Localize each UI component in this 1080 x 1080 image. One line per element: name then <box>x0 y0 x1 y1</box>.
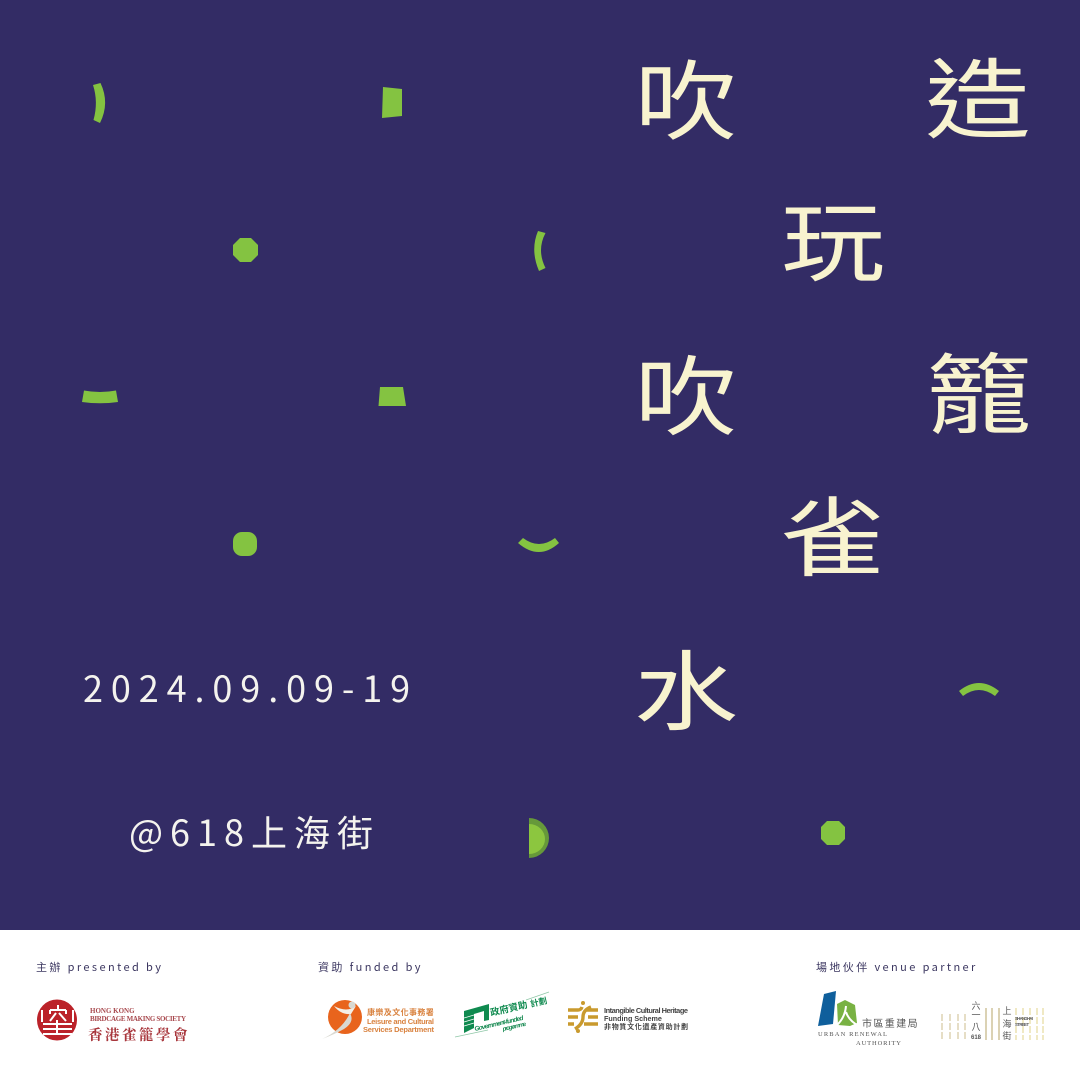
logo: Leisure and Cultural Services Department: 康樂及文化事務署 <box>367 1007 434 1018</box>
icon: green dot right <box>821 821 845 845</box>
label: presented by: 主辦 presented by <box>36 959 163 975</box>
logo: 618 Shanghai Street: SHANGHAI <box>1015 1016 1033 1021</box>
logo: Government-funded programme: 計劃 <box>529 994 548 1010</box>
icon: green arc top left <box>93 83 105 123</box>
logo: 618 Shanghai Street: 六 <box>971 999 981 1012</box>
logo: Hong Kong Birdcage Making Society: HONG KONG <box>90 1007 135 1015</box>
logo: 618 Shanghai Street: 618 <box>971 1035 982 1041</box>
logo: Urban Renewal Authority: URBAN RENEWAL <box>818 1031 887 1038</box>
label: funded by: 資助 funded by <box>318 959 423 975</box>
logo: 618 Shanghai Street: 一 <box>971 1008 981 1021</box>
icon: green smile arc <box>518 538 559 552</box>
logo: Government-funded programme: Government-funded <box>474 1015 525 1033</box>
logo: Intangible Cultural Heritage Funding Scheme: Funding Scheme <box>604 1014 662 1023</box>
logo: Government-funded programme: 政府資助 <box>489 997 529 1019</box>
logo: 618 Shanghai Street: 八 <box>971 1020 981 1033</box>
logo: Hong Kong Birdcage Making Society <box>37 1000 190 1045</box>
title: characters: 雀 <box>780 469 886 594</box>
title: characters <box>634 31 1032 748</box>
venue: @618上海街 <box>129 805 380 857</box>
logo: 618 Shanghai Street: 海 <box>1002 1017 1012 1030</box>
icon: green dot lower <box>233 532 257 556</box>
icon: green block top <box>382 87 402 118</box>
logo: 618 Shanghai Street: STREET <box>1015 1022 1029 1027</box>
logo: Government-funded programme <box>455 992 549 1037</box>
logo: 618 Shanghai Street: 街 <box>1002 1029 1012 1042</box>
title: characters: 籠 <box>926 326 1032 451</box>
title: characters: 造 <box>925 31 1031 156</box>
logo: Hong Kong Birdcage Making Society: BIRDCAGE MAKING SOCIETY <box>90 1015 186 1023</box>
footer panel <box>0 930 1080 1080</box>
logo: Leisure and Cultural Services Department: Services Department <box>363 1025 434 1034</box>
logo: Intangible Cultural Heritage Funding Scheme: 非物質文化遺產資助計劃 <box>604 1022 688 1032</box>
logo: Urban Renewal Authority: 市區重建局 <box>862 1015 919 1030</box>
logo: Urban Renewal Authority: AUTHORITY <box>856 1040 901 1047</box>
icon: green dot upper <box>233 238 258 262</box>
logo: 618 Shanghai Street <box>942 999 1043 1042</box>
logo: Hong Kong Birdcage Making Society: 香港雀籠學會 <box>88 1024 190 1045</box>
logo: Intangible Cultural Heritage Funding Scheme: Intangible Cultural Heritage <box>604 1006 688 1015</box>
icon: green block middle <box>378 387 406 406</box>
logo: Government-funded programme: programme <box>501 1022 527 1033</box>
label: venue partner: 場地伙伴 venue partner <box>816 959 978 975</box>
icon: green arc middle <box>534 231 546 271</box>
logo: Intangible Cultural Heritage Funding Scheme <box>568 1001 688 1033</box>
logo: Leisure and Cultural Services Department <box>322 1000 434 1039</box>
icon: green arc right <box>959 683 999 696</box>
logo: Leisure and Cultural Services Department: Leisure and Cultural <box>367 1017 434 1026</box>
date: 2024.09.09-19 <box>83 661 418 713</box>
title: characters: 吹 <box>635 33 737 158</box>
logo: 618 Shanghai Street: 上 <box>1002 1004 1012 1017</box>
icon: green arc left <box>82 390 118 403</box>
icon: half circle <box>529 818 549 858</box>
title: characters: 吹 <box>635 328 737 454</box>
title: characters: 水 <box>634 623 738 748</box>
logo: Urban Renewal Authority <box>818 991 919 1047</box>
title: characters: 玩 <box>781 174 885 299</box>
